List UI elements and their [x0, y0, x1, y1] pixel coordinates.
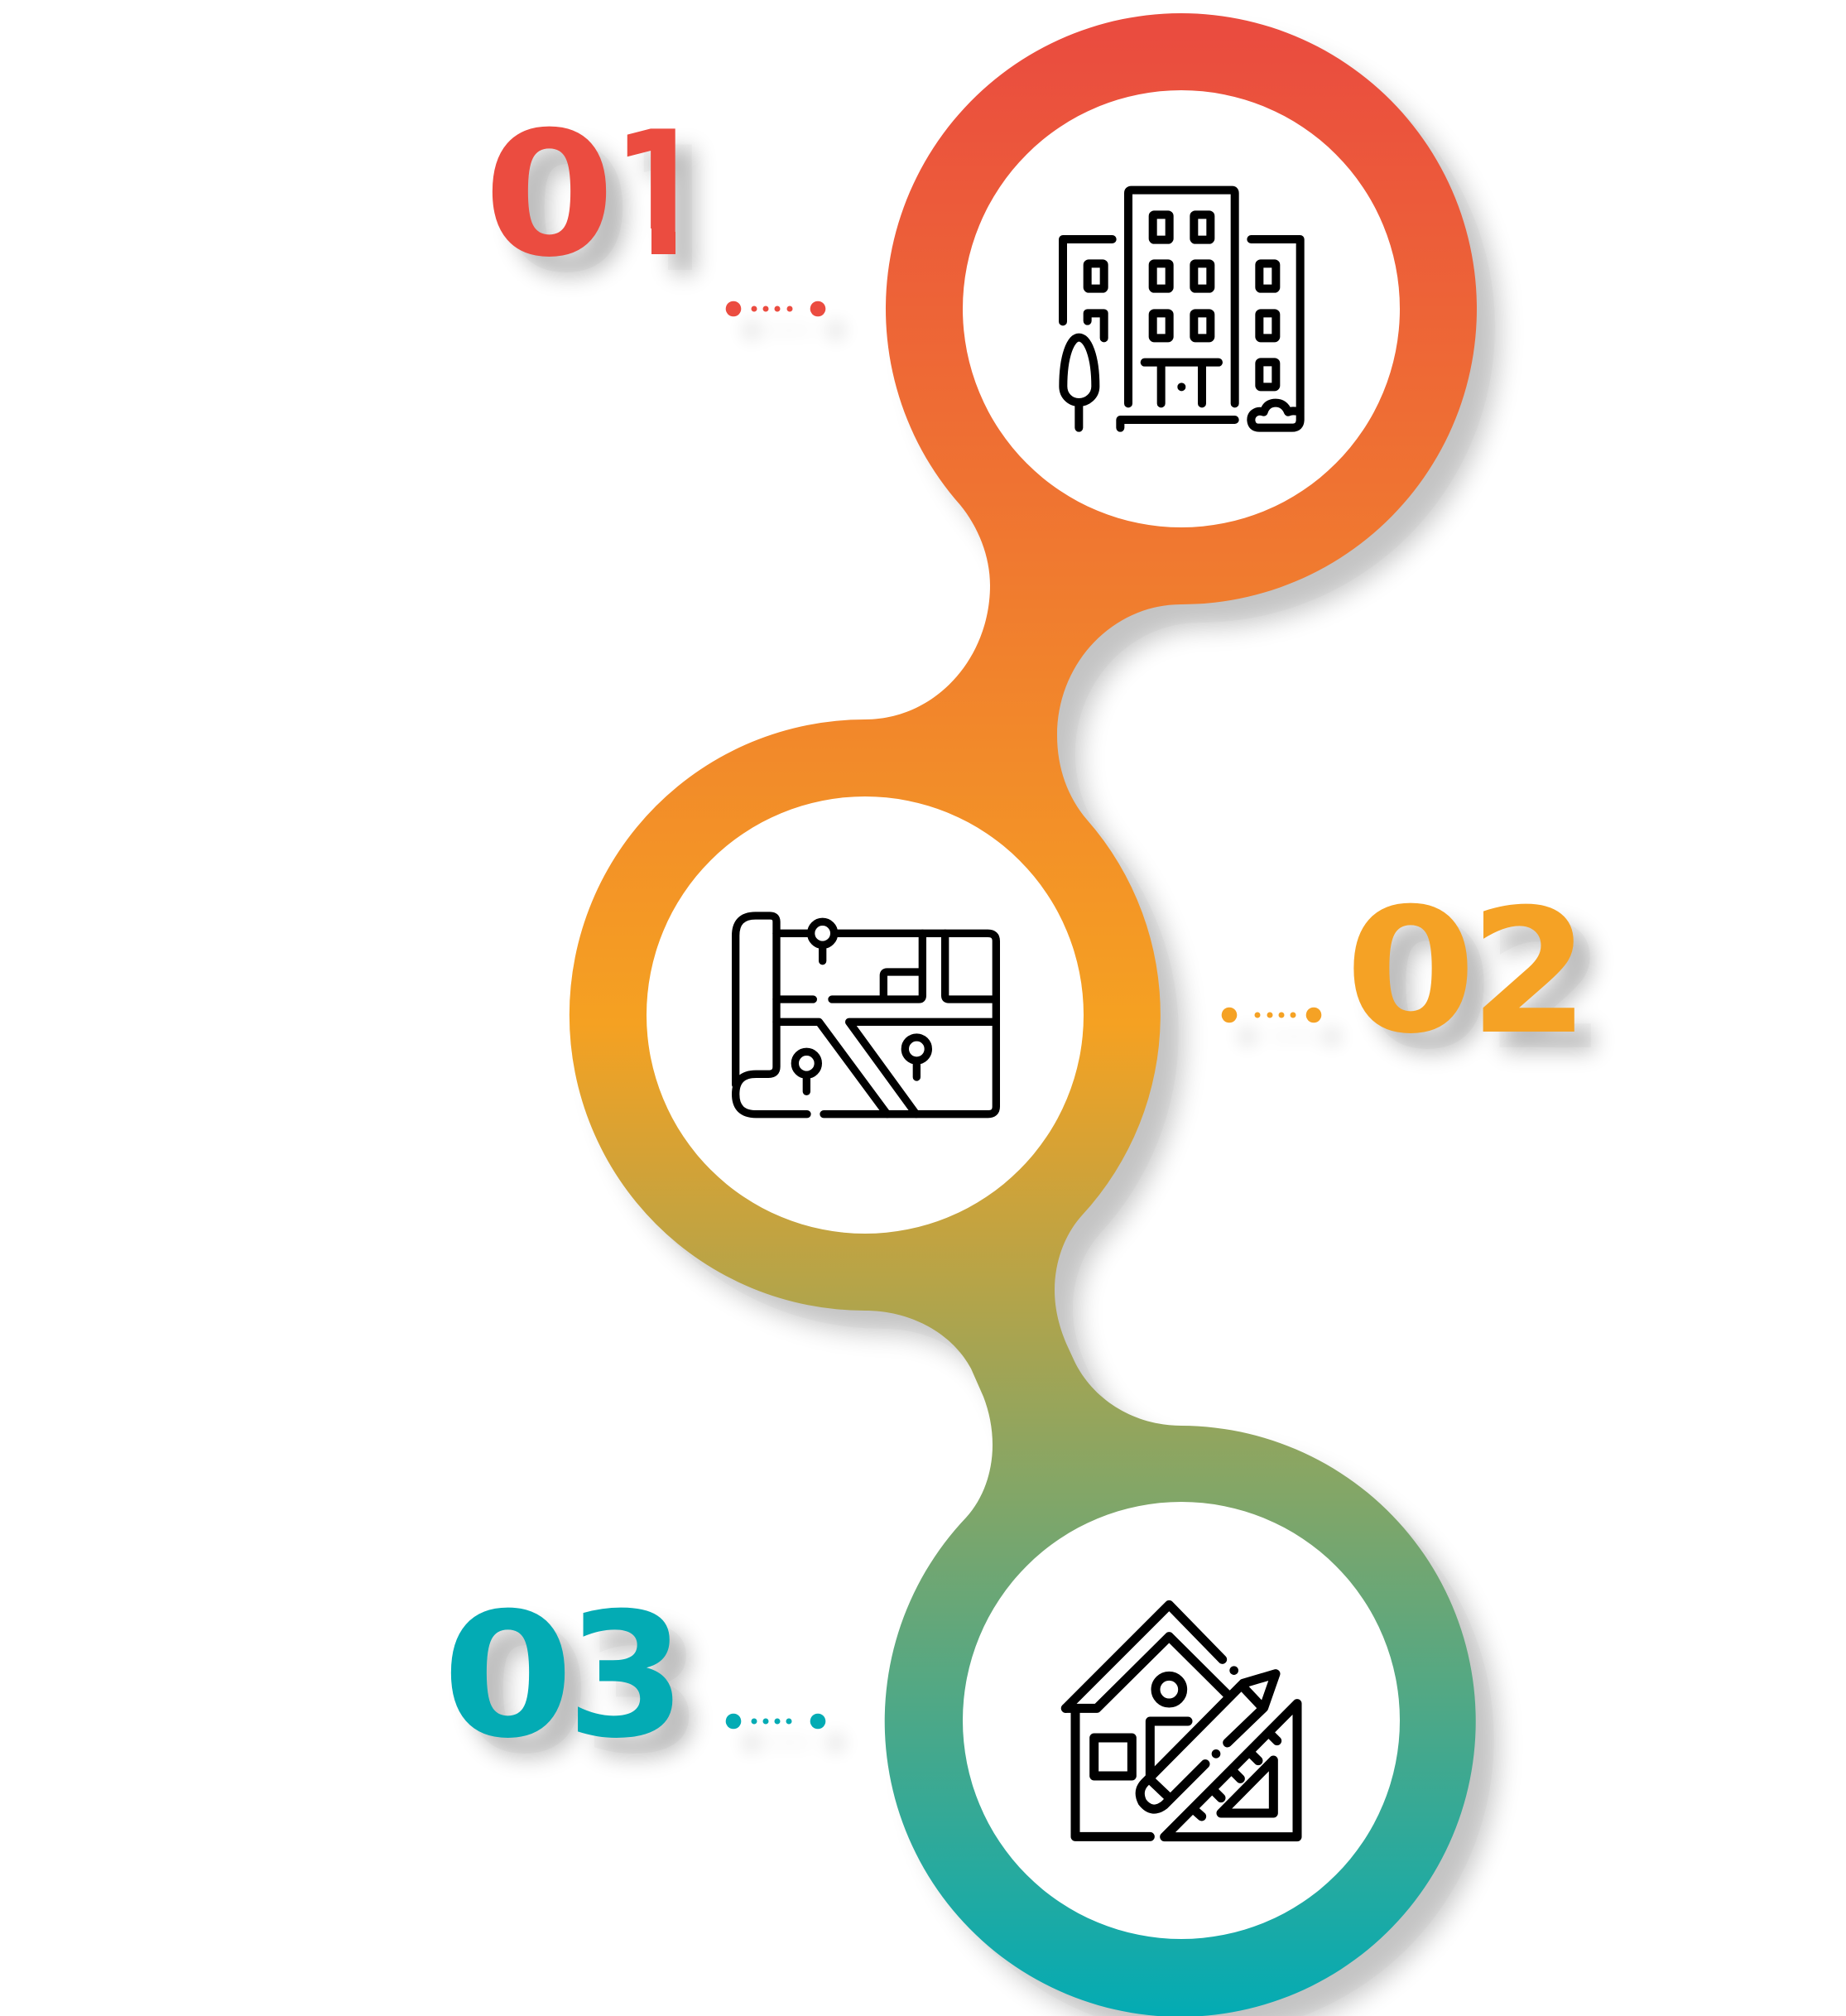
icon: apartment buildings: [1063, 190, 1300, 428]
number 03: 3: [566, 1576, 686, 1777]
white disc: step 1: [963, 90, 1400, 527]
number 03: 0: [442, 1576, 574, 1776]
dotted connector 02: [1222, 1008, 1321, 1022]
infographic canvas: [450, 13, 1603, 2016]
gradient chain of three connected circles: [570, 13, 1477, 2016]
number 02: 0: [1344, 871, 1477, 1071]
number 02: [1344, 871, 1589, 1073]
white disc: step 2: [647, 796, 1084, 1234]
number 02: 2: [1469, 873, 1589, 1073]
icon: house plan with pencil and set square: [1065, 1605, 1297, 1837]
dotted connector 01: [726, 301, 825, 316]
dotted connector 03: [726, 1714, 825, 1729]
icon: street map with pins: [736, 916, 996, 1114]
number 03: [442, 1576, 686, 1777]
number 01: 0: [483, 94, 615, 295]
number 01: 1: [612, 95, 708, 296]
white disc: step 3: [963, 1502, 1400, 1939]
number 01: [492, 126, 707, 287]
